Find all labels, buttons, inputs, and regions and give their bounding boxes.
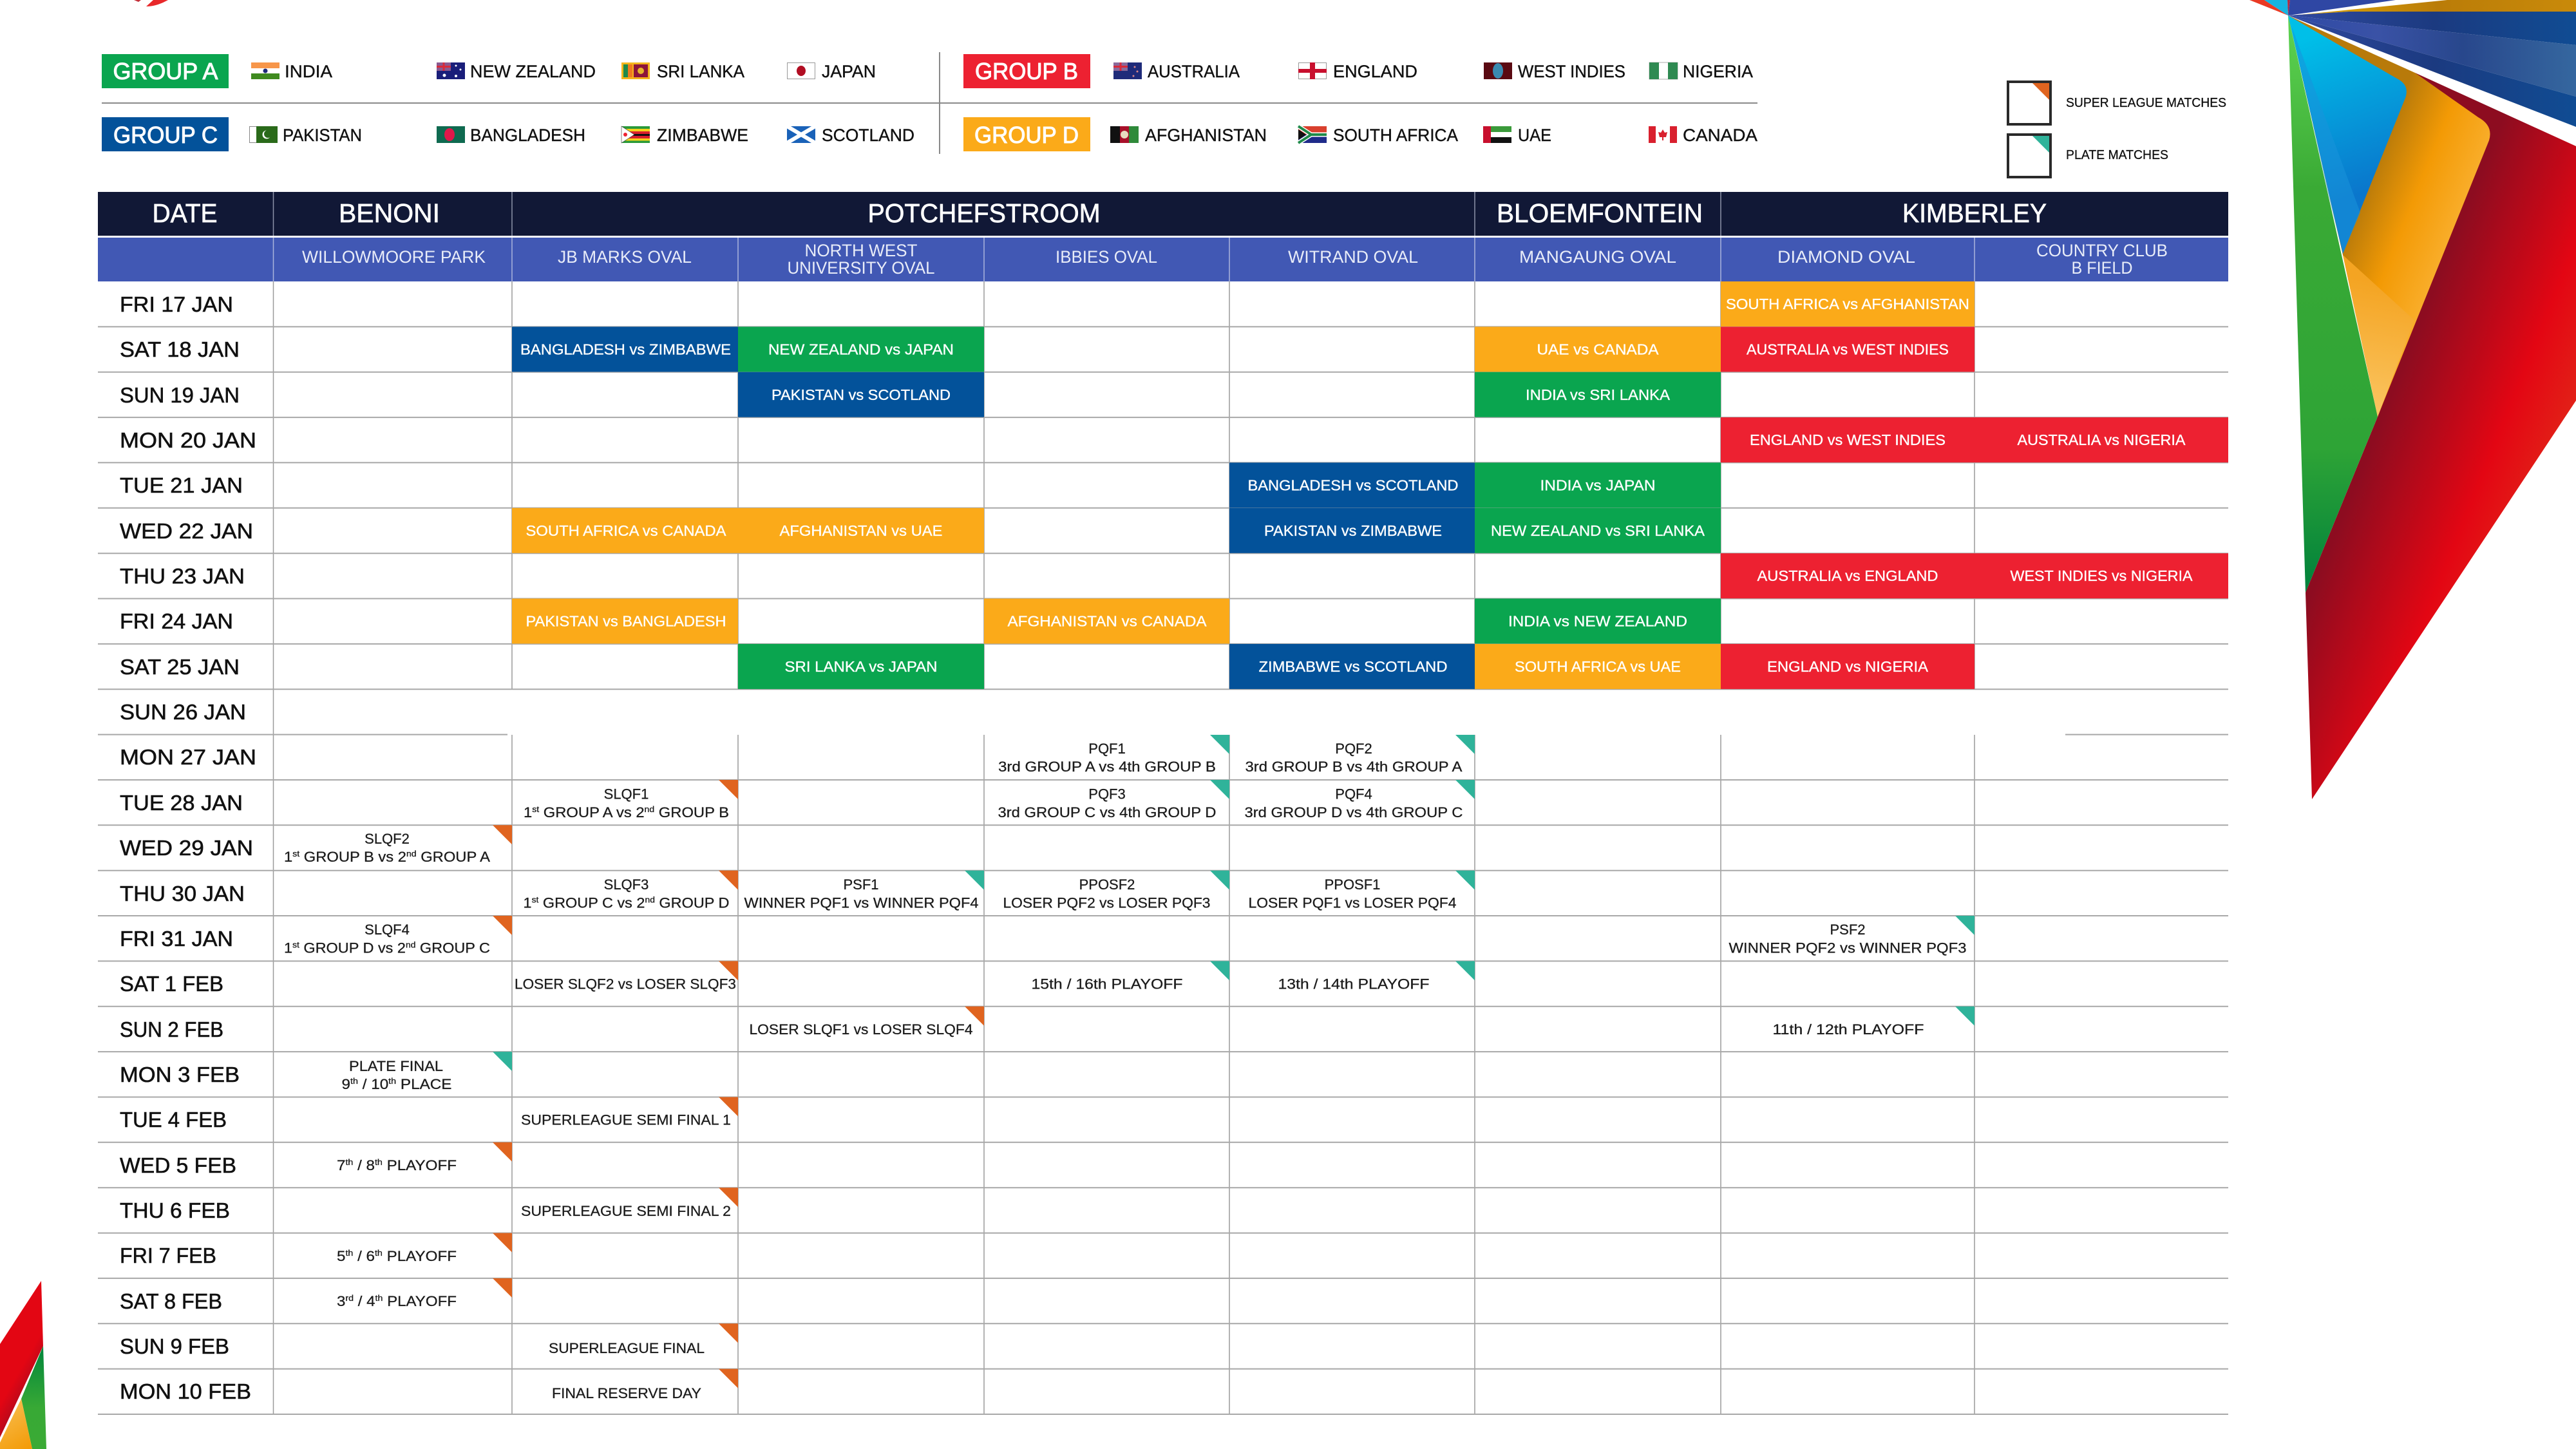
match: India vs New Zealand	[1475, 599, 1721, 644]
match: Sri Lanka vs Japan	[738, 644, 984, 689]
plate: PQF2: 3rd GROUP B vs 4th GROUP A	[1245, 759, 1463, 775]
match: Afghanistan vs UAE: AFGHANISTAN vs UAE	[779, 522, 943, 539]
plate final: th	[350, 1076, 358, 1086]
super league: SLQF2: st	[292, 849, 300, 858]
super league: SLQF2: 1	[284, 849, 292, 865]
match: New Zealand vs Japan	[738, 327, 984, 372]
date column: TUE 28 JAN	[120, 791, 243, 815]
super league: 5th / 6th playoff: th	[345, 1248, 353, 1258]
match: Zimbabwe vs Scotland	[1229, 644, 1475, 689]
ground: North West University Oval: NORTH WEST	[805, 241, 917, 260]
match: South Africa vs Canada	[512, 508, 738, 553]
plate: PPOSF1: PPOSF1	[1325, 876, 1380, 893]
group D	[963, 117, 1757, 151]
plate: PPOSF2: LOSER PQF2 vs LOSER PQF3	[1003, 895, 1211, 911]
match: Afghanistan vs Canada	[984, 599, 1229, 644]
super league: SLQF1: SLQF1	[604, 786, 649, 802]
ground: North West University Oval	[787, 241, 935, 278]
team: Sri Lanka: SRI LANKA	[657, 62, 744, 81]
team: Canada	[1649, 126, 1757, 145]
plate: PQF1: 3rd GROUP A vs 4th GROUP B	[998, 759, 1216, 775]
heading: Kimberley: KIMBERLEY	[1902, 198, 2047, 228]
match: South Africa vs Canada: SOUTH AFRICA vs CANADA	[526, 522, 726, 539]
match: India vs New Zealand: INDIA vs NEW ZEALAND	[1508, 613, 1687, 630]
team: Pakistan	[250, 126, 362, 145]
final reserve day	[552, 1369, 738, 1401]
date column: MON 20 JAN	[120, 428, 256, 452]
date column: WED 5 FEB	[120, 1153, 236, 1177]
super league: SLQF4: GROUP C	[415, 940, 490, 956]
date column: FRI 24 JAN	[120, 609, 233, 633]
super league final	[549, 1323, 738, 1356]
date column: SUN 26 JAN	[120, 700, 246, 724]
date column: SAT 8 FEB	[120, 1289, 222, 1313]
super league: 5th / 6th playoff: th	[375, 1248, 383, 1258]
team: UAE	[1483, 126, 1551, 145]
plate: 11th / 12th playoff: 11th / 12th PLAYOFF	[1772, 1021, 1924, 1037]
team: India	[251, 62, 332, 81]
date column: THU 30 JAN	[120, 882, 245, 905]
plate: 11th / 12th playoff	[1772, 1007, 1975, 1037]
legend: super league matches: SUPER LEAGUE MATCHES	[2066, 96, 2226, 110]
match: Australia vs England	[1721, 553, 1975, 598]
super league final: SUPERLEAGUE FINAL	[549, 1340, 705, 1356]
date column: TUE 4 FEB	[120, 1108, 227, 1132]
plate: 15th / 16th playoff: 15th / 16th PLAYOFF	[1032, 976, 1182, 992]
super league: 3rd / 4th playoff	[337, 1278, 512, 1309]
super league: 7th / 8th playoff	[337, 1142, 512, 1173]
match: Bangladesh vs Zimbabwe	[512, 327, 738, 372]
group A badge	[102, 54, 229, 88]
match: Australia vs Nigeria: AUSTRALIA vs NIGERIA	[2017, 431, 2186, 448]
legend: plate matches: PLATE MATCHES	[2066, 148, 2168, 162]
super league: SLQF1	[524, 780, 738, 820]
match: England vs Nigeria: ENGLAND vs NIGERIA	[1767, 658, 1929, 675]
match: India vs Japan: INDIA vs JAPAN	[1540, 477, 1655, 493]
super league: 5th / 6th playoff: / 6	[353, 1248, 375, 1264]
super league: 5th / 6th playoff: 5	[337, 1248, 345, 1264]
date column: THU 23 JAN	[120, 564, 245, 588]
plate: PPOSF1	[1248, 871, 1475, 911]
super league semi final 1	[521, 1097, 738, 1128]
team: Japan: JAPAN	[822, 62, 876, 81]
plate final	[341, 1052, 512, 1092]
super league: loser SLQF1 vs loser SLQF4: LOSER SLQF1 vs LOSER SLQF4	[750, 1021, 972, 1037]
date column: WED 22 JAN	[120, 519, 253, 543]
super league: SLQF1: GROUP B	[654, 804, 729, 820]
plate: PSF2: PSF2	[1830, 922, 1866, 938]
super league: SLQF4: nd	[406, 940, 415, 949]
plate: PQF1: PQF1	[1088, 741, 1126, 757]
team: Scotland: SCOTLAND	[822, 126, 914, 145]
legend: match types	[2008, 82, 2226, 177]
super league: 3rd / 4th playoff: 3	[337, 1293, 345, 1309]
plate: 15th / 16th playoff	[1032, 961, 1229, 992]
super league semi final 2	[521, 1188, 738, 1219]
plate: PPOSF1: LOSER PQF1 vs LOSER PQF4	[1248, 895, 1457, 911]
super league: 7th / 8th playoff: th	[345, 1157, 353, 1167]
plate: PQF3	[998, 780, 1229, 820]
super league: SLQF3: 1	[523, 895, 531, 911]
date column: SUN 19 JAN	[120, 383, 240, 407]
match: Australia vs England: AUSTRALIA vs ENGLAND	[1757, 567, 1938, 584]
legend: plate matches	[2008, 135, 2168, 177]
ground: North West University Oval: UNIVERSITY OVAL	[787, 258, 935, 278]
group stage fixtures	[512, 281, 2228, 689]
super league: SLQF2: GROUP B vs 2	[299, 849, 406, 865]
super league: SLQF1: nd	[645, 804, 654, 814]
plate: PQF4	[1244, 780, 1475, 820]
super league: SLQF4: st	[292, 940, 299, 949]
match: Pakistan vs Bangladesh: PAKISTAN vs BANGLADESH	[526, 613, 726, 630]
plate: PPOSF2: PPOSF2	[1079, 876, 1135, 893]
match: South Africa vs Afghanistan	[1721, 281, 1975, 327]
match: Sri Lanka vs Japan: SRI LANKA vs JAPAN	[784, 658, 938, 675]
match: Australia vs Nigeria	[1975, 417, 2228, 462]
super league: loser SLQF2 vs loser SLQF3	[515, 961, 738, 992]
team: Canada: CANADA	[1683, 126, 1757, 145]
match: South Africa vs UAE	[1475, 644, 1721, 689]
super league: SLQF2	[284, 825, 512, 865]
decorative artwork: top right ribbon burst	[2249, 0, 2576, 799]
super league: SLQF3: nd	[645, 895, 655, 904]
super league: SLQF3: st	[532, 895, 539, 904]
match: India vs Sri Lanka: INDIA vs SRI LANKA	[1526, 386, 1671, 403]
super league: 7th / 8th playoff: / 8	[353, 1157, 375, 1173]
super league: SLQF2: nd	[406, 849, 417, 858]
knockout fixtures	[284, 735, 1975, 1401]
group B badge	[963, 54, 1090, 88]
team: Zimbabwe: ZIMBABWE	[657, 126, 748, 145]
decorative artwork: top left red fragment	[134, 0, 168, 6]
group D badge	[963, 117, 1090, 151]
team: England: ENGLAND	[1333, 62, 1417, 81]
match: India vs Japan	[1475, 462, 1721, 507]
match: India vs Sri Lanka	[1475, 372, 1721, 417]
match: UAE vs Canada	[1475, 327, 1721, 372]
super league: SLQF1: st	[532, 804, 540, 814]
super league: SLQF4: SLQF4	[365, 922, 410, 938]
match: UAE vs Canada: UAE vs CANADA	[1537, 341, 1659, 358]
plate: 13th / 14th playoff: 13th / 14th PLAYOFF	[1278, 976, 1430, 992]
date column	[120, 292, 256, 1403]
super league: 5th / 6th playoff: PLAYOFF	[383, 1248, 457, 1264]
plate: PSF2: WINNER PQF2 vs WINNER PQF3	[1728, 940, 1967, 956]
team: Nigeria: NIGERIA	[1683, 62, 1753, 81]
group A badge: GROUP A	[113, 58, 218, 84]
date column: MON 10 FEB	[120, 1379, 251, 1403]
plate: PSF1	[744, 871, 984, 911]
group C	[102, 117, 914, 151]
date column: MON 3 FEB	[120, 1063, 240, 1086]
match: New Zealand vs Sri Lanka: NEW ZEALAND vs SRI LANKA	[1491, 522, 1705, 539]
match: New Zealand vs Sri Lanka	[1475, 508, 1721, 553]
plate: PQF2	[1245, 735, 1475, 775]
plate final: th	[388, 1076, 396, 1086]
super league: 3rd / 4th playoff: / 4	[354, 1293, 375, 1309]
team: West Indies: WEST INDIES	[1518, 62, 1625, 81]
ground: Country Club B Field: COUNTRY CLUB	[2036, 241, 2168, 260]
super league: SLQF3: GROUP D	[655, 895, 729, 911]
date column: FRI 31 JAN	[120, 927, 233, 951]
date column: THU 6 FEB	[120, 1198, 230, 1222]
plate final: PLACE	[396, 1076, 452, 1092]
match: Australia vs West Indies: AUSTRALIA vs WEST INDIES	[1747, 341, 1949, 358]
group C badge	[102, 117, 229, 151]
plate: PQF3: 3rd GROUP C vs 4th GROUP D	[998, 804, 1216, 820]
match: West Indies vs Nigeria: WEST INDIES vs NIGERIA	[2011, 567, 2193, 584]
plate: PQF4: 3rd GROUP D vs 4th GROUP C	[1244, 804, 1463, 820]
ground name header band	[98, 238, 2228, 281]
group D badge: GROUP D	[974, 122, 1079, 148]
team: Japan	[787, 62, 876, 81]
super league: SLQF1: 1	[524, 804, 531, 820]
team: Nigeria	[1649, 62, 1753, 81]
ground: Diamond Oval: DIAMOND OVAL	[1777, 247, 1915, 267]
match: Afghanistan vs Canada: AFGHANISTAN vs CANADA	[1007, 613, 1207, 630]
group B	[963, 54, 1753, 88]
match: New Zealand vs Japan: NEW ZEALAND vs JAPAN	[768, 341, 954, 358]
match: Bangladesh vs Scotland	[1229, 462, 1475, 507]
super league: SLQF4	[284, 916, 512, 956]
super league semi final 2: SUPERLEAGUE SEMI FINAL 2	[521, 1203, 731, 1219]
super league: SLQF2: GROUP A	[417, 849, 490, 865]
ground: Mangaung Oval: MANGAUNG OVAL	[1519, 247, 1676, 267]
match: West Indies vs Nigeria	[1975, 553, 2228, 598]
date column: WED 29 JAN	[120, 836, 253, 860]
match: Afghanistan vs UAE	[738, 508, 984, 553]
date column: SAT 18 JAN	[120, 337, 240, 361]
plate: PQF3: PQF3	[1088, 786, 1126, 802]
date column: TUE 21 JAN	[120, 473, 243, 497]
ground: Country Club B Field	[2036, 241, 2168, 278]
match: Pakistan vs Zimbabwe: PAKISTAN vs ZIMBABWE	[1264, 522, 1442, 539]
final reserve day: FINAL RESERVE DAY	[552, 1385, 701, 1401]
decorative artwork: bottom left ribbon	[0, 1281, 46, 1449]
super league: SLQF4: 1	[284, 940, 292, 956]
match: Pakistan vs Scotland: PAKISTAN vs SCOTLAND	[772, 386, 951, 403]
super league: 3rd / 4th playoff: th	[375, 1293, 383, 1303]
match: South Africa vs UAE: SOUTH AFRICA vs UAE	[1515, 658, 1681, 675]
team: Australia: AUSTRALIA	[1148, 62, 1240, 81]
ground: Ibbies Oval: IBBIES OVAL	[1056, 247, 1157, 267]
team: Afghanistan: AFGHANISTAN	[1145, 126, 1267, 145]
date column: SAT 1 FEB	[120, 972, 223, 996]
super league: SLQF3	[523, 871, 738, 911]
date column: SUN 9 FEB	[120, 1334, 229, 1358]
plate: PSF1: PSF1	[843, 876, 879, 893]
team: Pakistan: PAKISTAN	[283, 126, 362, 145]
team: Bangladesh: BANGLADESH	[470, 126, 585, 145]
team groups key	[102, 52, 1757, 154]
heading: Benoni: BENONI	[339, 198, 440, 228]
super league: 7th / 8th playoff: PLAYOFF	[383, 1157, 457, 1173]
heading: date: DATE	[152, 198, 218, 228]
match: Zimbabwe vs Scotland: ZIMBABWE vs SCOTLAND	[1258, 658, 1448, 675]
plate: PSF1: WINNER PQF1 vs WINNER PQF4	[744, 895, 979, 911]
plate: PQF2: PQF2	[1335, 741, 1372, 757]
ground: Country Club B Field: B FIELD	[2071, 258, 2133, 278]
plate: PQF1	[998, 735, 1229, 775]
date column: FRI 17 JAN	[120, 292, 233, 316]
super league: 3rd / 4th playoff: PLAYOFF	[383, 1293, 457, 1309]
legend: super league matches	[2008, 82, 2226, 124]
plate: 13th / 14th playoff	[1278, 961, 1475, 992]
fixtures table	[98, 192, 2228, 1414]
group C badge: GROUP C	[113, 122, 218, 148]
team: New Zealand: NEW ZEALAND	[470, 62, 596, 81]
match: England vs Nigeria	[1721, 644, 1975, 689]
super league: SLQF3: GROUP C vs 2	[538, 895, 645, 911]
super league: SLQF4: GROUP D vs 2	[299, 940, 406, 956]
super league: 7th / 8th playoff: 7	[337, 1157, 345, 1173]
venue city header band	[98, 192, 2228, 236]
super league: 7th / 8th playoff: th	[375, 1157, 383, 1167]
group B badge: GROUP B	[975, 58, 1078, 84]
date column: SUN 2 FEB	[120, 1018, 223, 1041]
ground: Willowmoore Park: WILLOWMOORE PARK	[302, 247, 486, 267]
ground: JB Marks Oval: JB MARKS OVAL	[558, 247, 692, 267]
match: Australia vs West Indies	[1721, 327, 1975, 372]
date column: FRI 7 FEB	[120, 1244, 216, 1267]
date column: MON 27 JAN	[120, 745, 256, 769]
ground: Witrand Oval: WITRAND OVAL	[1288, 247, 1418, 267]
heading: Potchefstroom: POTCHEFSTROOM	[868, 198, 1100, 228]
super league semi final 1: SUPERLEAGUE SEMI FINAL 1	[521, 1112, 731, 1128]
super league: 3rd / 4th playoff: rd	[345, 1293, 354, 1303]
super league: 5th / 6th playoff	[337, 1233, 512, 1264]
super league: SLQF2: SLQF2	[365, 831, 410, 847]
team: South Africa: SOUTH AFRICA	[1333, 126, 1458, 145]
plate final: / 10	[358, 1076, 388, 1092]
match: Bangladesh vs Scotland: BANGLADESH vs SCOTLAND	[1248, 477, 1458, 493]
match: England vs West Indies	[1721, 417, 1975, 462]
match: Pakistan vs Zimbabwe	[1229, 508, 1475, 553]
match: Bangladesh vs Zimbabwe: BANGLADESH vs ZIMBABWE	[520, 341, 731, 358]
plate: PSF2	[1728, 916, 1975, 956]
team: UAE: UAE	[1518, 126, 1551, 145]
match: South Africa vs Afghanistan: SOUTH AFRICA vs AFGHANISTAN	[1726, 296, 1969, 312]
super league: SLQF1: GROUP A vs 2	[539, 804, 645, 820]
plate: PQF4: PQF4	[1335, 786, 1372, 802]
match: Pakistan vs Scotland	[738, 372, 984, 417]
plate: PPOSF2	[1003, 871, 1229, 911]
team: India: INDIA	[285, 62, 332, 81]
match: England vs West Indies: ENGLAND vs WEST INDIES	[1750, 431, 1946, 448]
plate final: 9	[341, 1076, 350, 1092]
super league: loser SLQF2 vs loser SLQF3: LOSER SLQF2 vs LOSER SLQF3	[515, 976, 736, 992]
heading: Bloemfontein: BLOEMFONTEIN	[1497, 198, 1703, 228]
plate final: PLATE FINAL	[349, 1058, 443, 1074]
match: Pakistan vs Bangladesh	[512, 599, 738, 644]
team: Sri Lanka	[621, 62, 744, 81]
super league: SLQF3: SLQF3	[604, 876, 649, 893]
group A	[102, 54, 876, 88]
super league: loser SLQF1 vs loser SLQF4	[750, 1007, 984, 1037]
date column: SAT 25 JAN	[120, 655, 240, 679]
